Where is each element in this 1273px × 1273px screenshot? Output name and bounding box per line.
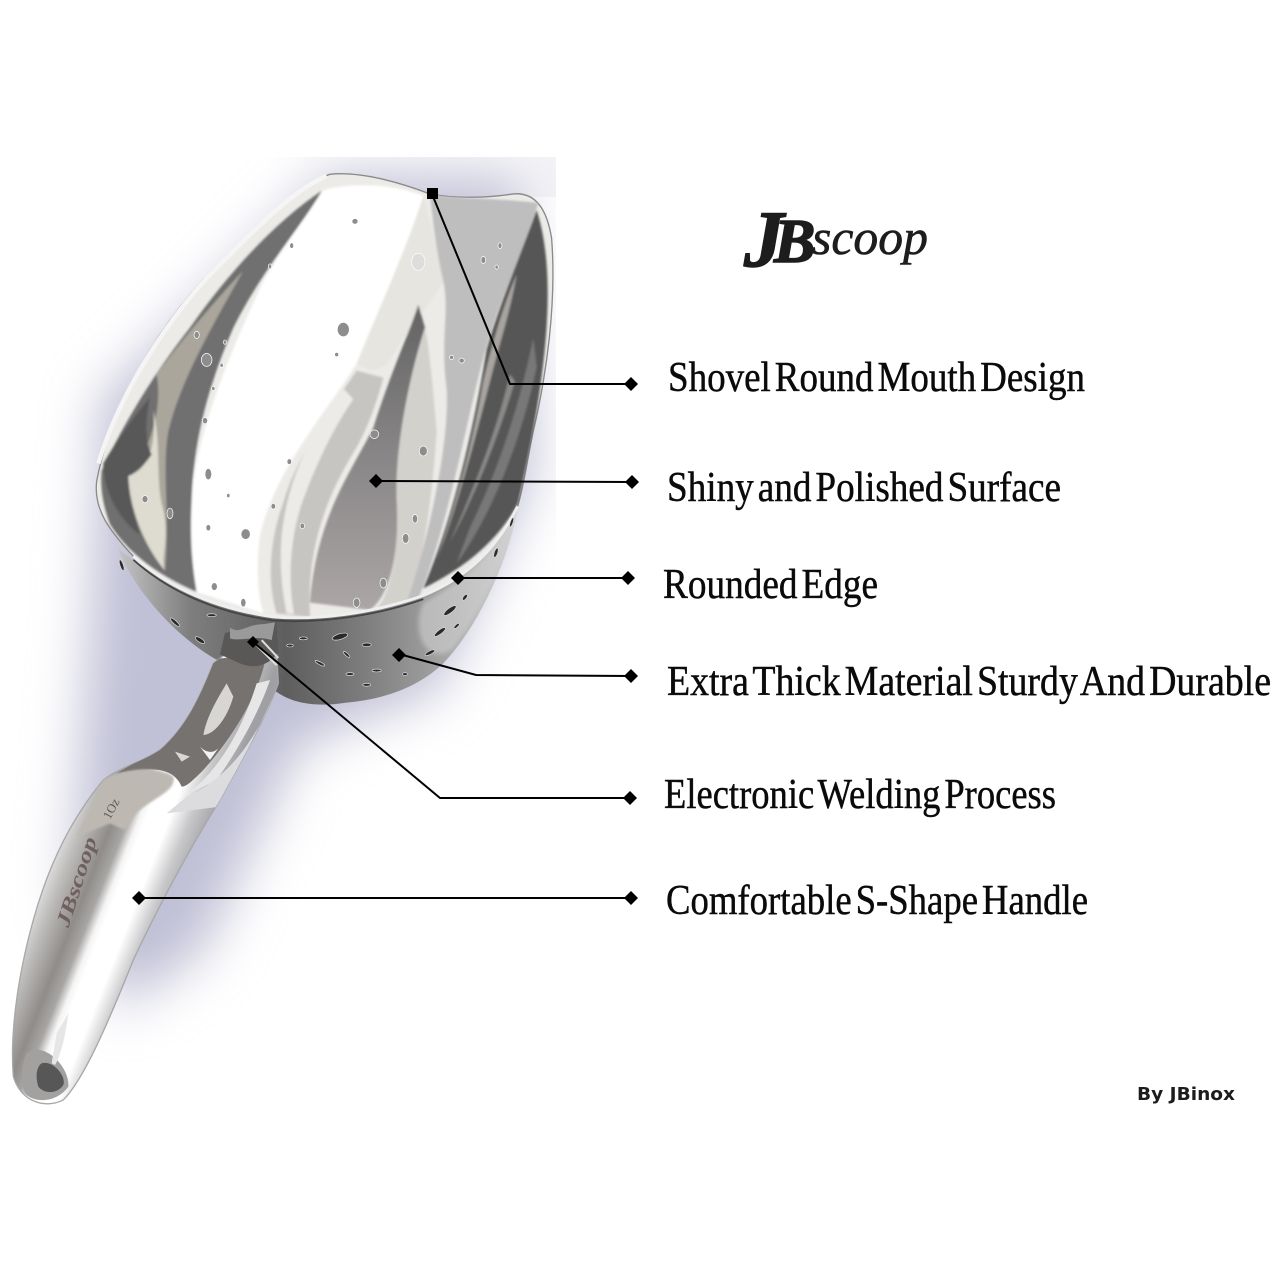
bowl exterior light patch [419,521,513,654]
left reflection dark patch [103,397,152,535]
callout: Shovel Round Mouth Design: Shovel Round Mouth Design [668,355,1085,401]
handle base [12,633,278,1104]
callout: Comfortable S-Shape Handle [132,878,1088,924]
left reflection beige [131,271,243,571]
handle tip [22,1050,68,1100]
right grey wedge [407,194,538,603]
callout: Comfortable S-Shape Handle: Comfortable S-Shape Handle [666,878,1088,924]
callout: Shiny and Polished Surface: Shiny and Polished Surface [667,465,1061,511]
callout: Rounded Edge [451,562,878,608]
scoop handle [12,633,278,1104]
callout: Electronic Welding Process [247,636,1056,818]
handle engraving: JBscoop [52,834,102,931]
rim highlight [98,176,327,463]
right of flame cream [377,328,437,608]
callout: Shiny and Polished Surface [369,465,1061,511]
callout: Rounded Edge: Rounded Edge [663,562,878,608]
right dark reflection [423,210,548,588]
left reflection dark [101,190,322,592]
water droplets interior [142,219,502,607]
callout: Extra Thick Material [392,648,1271,705]
handle neck dark [117,653,267,787]
handle neck highlight [203,683,233,735]
credit: By JBinox [1137,1084,1235,1105]
logo: J [743,196,787,284]
photo background shadow [45,157,556,1021]
water droplets exterior [118,517,514,686]
logo: scoop [812,209,928,265]
bowl interior base [96,174,553,618]
handle size mark: 1Oz [100,796,123,821]
weld joint [220,622,278,666]
central white [191,185,423,613]
logo: B [773,208,815,276]
scoop bowl [96,174,553,705]
handle upper right strip [167,700,272,814]
callout: Shovel Round Mouth Design [427,188,1085,401]
central flame [310,305,425,610]
left reflection light blotch [128,410,166,571]
bowl interior reflections [101,185,548,617]
grey folds [271,371,383,617]
handle shoulder [86,768,175,832]
right reflection streaks [437,274,517,560]
callout: Electronic Welding Process: Electronic Welding Process [664,772,1056,818]
cream fold [357,196,443,370]
bowl exterior [118,506,518,705]
